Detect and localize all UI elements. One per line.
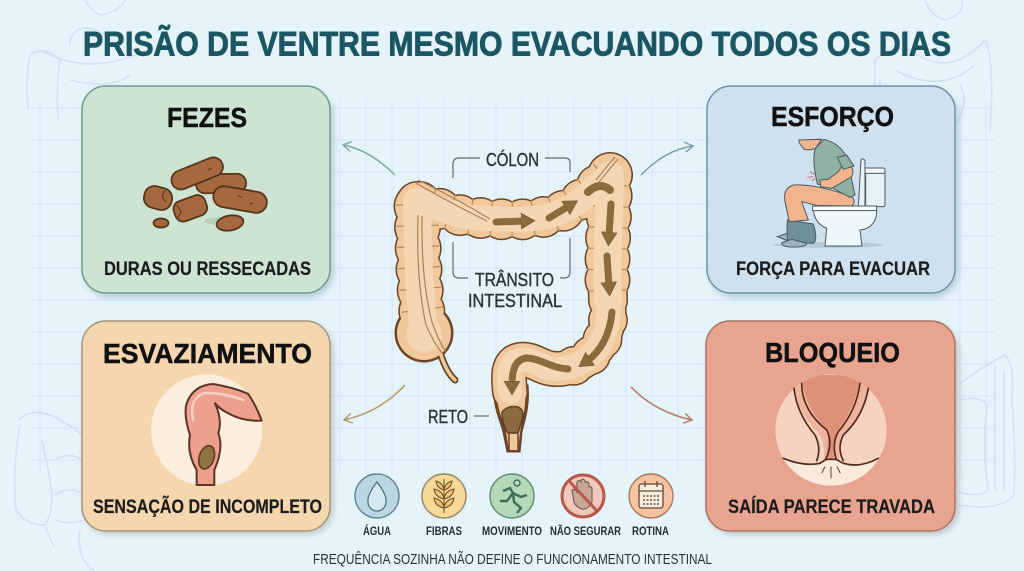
icon: não segurar: NÃO SEGURAR bbox=[550, 523, 621, 538]
label: reto: RETO bbox=[428, 407, 468, 427]
arrow: to esforço bbox=[641, 146, 693, 175]
panel: esforço bbox=[707, 86, 959, 298]
arrow: to fezes bbox=[343, 145, 395, 175]
icon: água: ÁGUA bbox=[363, 523, 391, 538]
icon: movimento bbox=[482, 474, 542, 538]
panel: bloqueio bbox=[706, 321, 959, 535]
icon: não segurar bbox=[550, 475, 621, 538]
icon: person straining on toilet bbox=[773, 139, 885, 248]
icon: rotina bbox=[629, 474, 673, 538]
label: trânsito intestinal bbox=[468, 270, 562, 311]
label: cólon: CÓLON bbox=[486, 149, 539, 170]
panel: esvaziamento bbox=[82, 321, 334, 535]
panel: fezes bbox=[82, 86, 334, 298]
flow arrows bbox=[496, 186, 612, 385]
footer note: FREQUÊNCIA SOZINHA NÃO DEFINE O FUNCIONAMENTO INTESTINAL bbox=[313, 551, 712, 568]
icon: água bbox=[355, 474, 399, 538]
colon stripes bbox=[416, 157, 618, 353]
heading: esvaziamento: ESVAZIAMENTO bbox=[103, 338, 312, 369]
icon: movimento: MOVIMENTO bbox=[482, 524, 542, 538]
subtitle: força: FORÇA PARA EVACUAR bbox=[736, 259, 930, 280]
colon label bracket bbox=[453, 158, 570, 278]
label: trânsito intestinal: INTESTINAL bbox=[468, 291, 562, 311]
label: trânsito intestinal: TRÂNSITO bbox=[475, 270, 554, 290]
arrow: to esvaziamento bbox=[344, 385, 405, 420]
heading: esforço: ESFORÇO bbox=[771, 101, 894, 132]
icon: fibras: FIBRAS bbox=[426, 524, 462, 538]
icon: rectum with retained stool bbox=[151, 374, 262, 486]
subtitle: incompleto: SENSAÇÃO DE INCOMPLETO bbox=[93, 496, 322, 518]
heading: bloqueio: BLOQUEIO bbox=[765, 337, 900, 368]
icon: rotina: ROTINA bbox=[632, 524, 669, 538]
subtitle: travada: SAÍDA PARECE TRAVADA bbox=[728, 496, 935, 518]
stool in rectum bbox=[502, 407, 523, 433]
subtitle: duras: DURAS OU RESSECADAS bbox=[104, 259, 311, 280]
icon: hard stools bbox=[142, 155, 268, 233]
icon: blocked anal canal bbox=[775, 374, 887, 487]
icon: fibras bbox=[422, 474, 466, 538]
arrow: to bloqueio bbox=[631, 387, 692, 420]
heading: fezes: FEZES bbox=[167, 102, 247, 133]
colon illustration bbox=[394, 157, 618, 452]
